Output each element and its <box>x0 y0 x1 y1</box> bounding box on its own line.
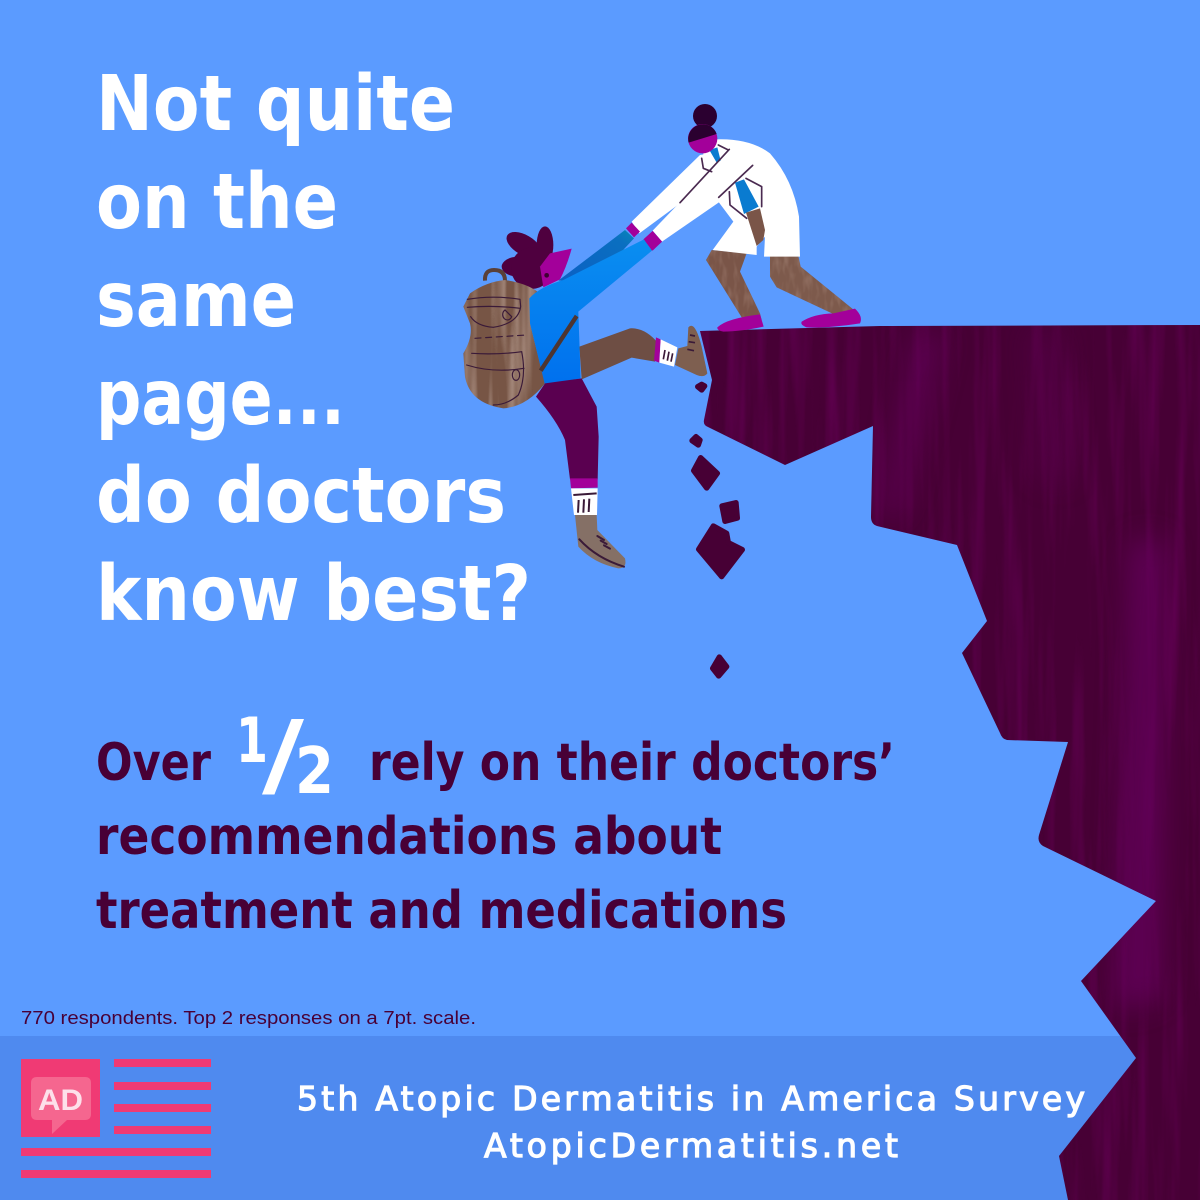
hanging leg <box>536 378 625 568</box>
one half fraction: / <box>262 701 304 808</box>
doctor shoes <box>717 309 861 332</box>
logo: AD <box>38 1084 83 1117</box>
doctor figure <box>626 104 861 332</box>
title: same <box>96 256 296 345</box>
statistic text <box>96 701 895 941</box>
logo <box>21 1059 211 1178</box>
doctor coat <box>632 139 800 257</box>
one half fraction: 1 <box>236 704 268 777</box>
footer text: 5th Atopic Dermatitis in America Survey <box>297 1079 1085 1118</box>
statistic text: recommendations about <box>96 807 722 867</box>
statistic text: Over <box>96 733 211 793</box>
patient torso <box>529 231 662 385</box>
one half fraction: 2 <box>295 735 334 809</box>
falling rocks <box>692 384 742 676</box>
footer band <box>0 1036 1200 1200</box>
title: on the <box>96 158 338 247</box>
footer text <box>297 1079 1085 1165</box>
title: do doctors <box>96 452 506 541</box>
patient figure <box>460 226 707 410</box>
one half fraction <box>236 701 334 809</box>
doctor legs <box>703 248 857 322</box>
doctor cuffs <box>626 223 662 251</box>
coat seams <box>680 145 762 218</box>
patient hair <box>502 226 553 289</box>
footnote: 770 respondents. Top 2 responses on a 7pt. scale. <box>21 1007 476 1028</box>
statistic text: treatment and medications <box>96 881 787 941</box>
title: know best? <box>96 550 531 639</box>
doctor head <box>688 104 717 153</box>
doctor shirt and skin <box>709 147 765 246</box>
title: Not quite <box>96 60 455 149</box>
cliff <box>700 325 1200 1200</box>
title <box>96 60 531 639</box>
title: page... <box>96 354 345 443</box>
footer text: AtopicDermatitis.net <box>484 1126 898 1165</box>
patient back arm <box>558 230 634 281</box>
kicked leg <box>579 326 707 379</box>
statistic text: rely on their doctors’ <box>369 733 895 793</box>
backpack <box>460 270 547 410</box>
patient face <box>540 249 572 287</box>
